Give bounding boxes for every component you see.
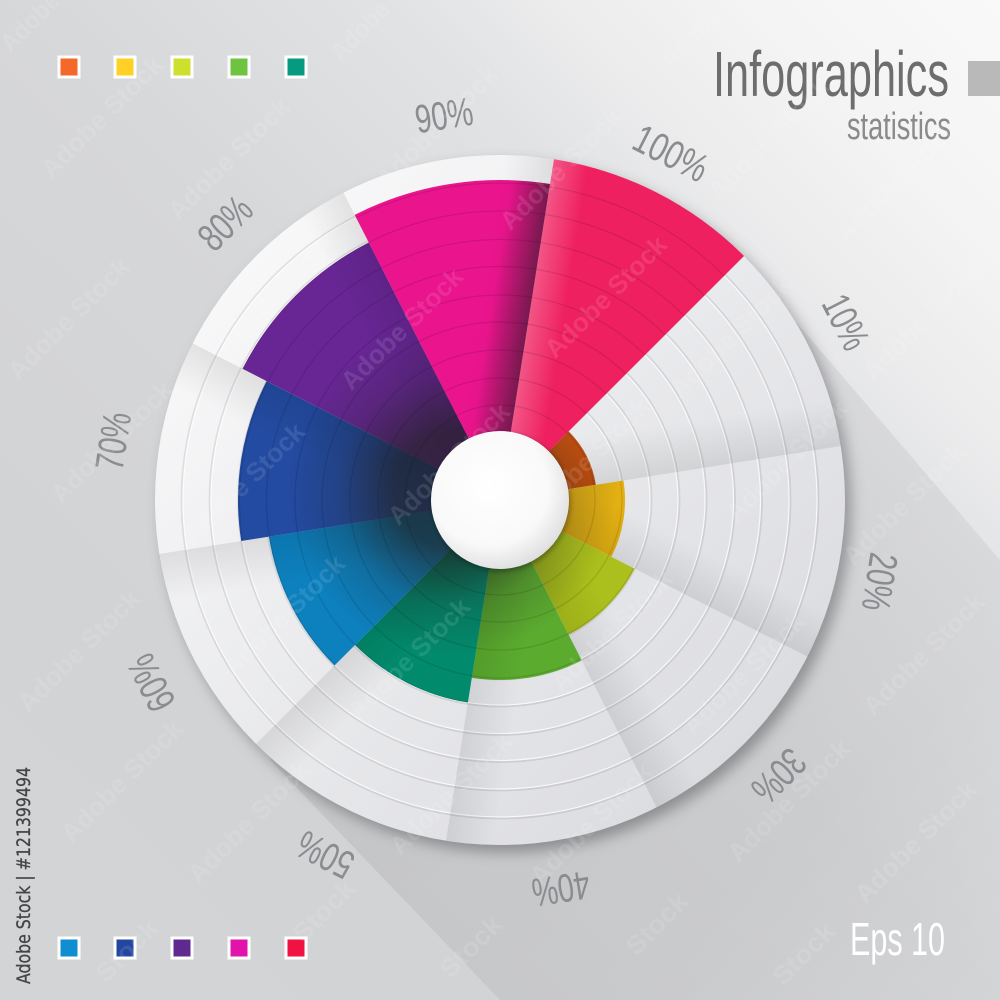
watermark pattern: Adobe Stock [369,59,504,194]
sector 40% green [472,500,582,680]
watermark pattern: Adobe Stock [856,252,991,387]
chart: coloured radial sectors [238,159,744,702]
watermark pattern: Adobe Stock [1,251,136,386]
label 50%: 50% [290,821,361,887]
sector 10% orange [500,431,596,500]
watermark pattern: Adobe Stock [544,563,679,698]
watermark pattern: Adobe Stock [334,261,469,396]
label 70%: 70% [88,409,140,473]
watermark pattern: Adobe Stock [721,733,856,868]
sector 60% blue [269,500,500,666]
swatch orange [59,57,79,77]
watermark pattern: Adobe Stock [11,583,146,718]
watermark pattern: Adobe Stock [208,223,343,358]
watermark pattern: Adobe Stock [856,586,991,721]
red sector highlight [500,159,744,500]
centre hub shadow [431,432,571,572]
watermark pattern: Adobe Stock [161,91,296,226]
watermark pattern: Adobe Stock [44,374,179,509]
panel: wheel plate [155,155,845,845]
sector 100% red [500,159,744,500]
watermark pattern: Adobe Stock [381,396,516,531]
watermark pattern: Adobe Stock [676,606,811,741]
sector 20% yellow [500,480,625,557]
concentric ring grooves on plate [182,182,818,818]
watermark pattern: Adobe Stock [848,774,983,909]
swatch purple [172,938,192,958]
legend: top row [59,57,306,77]
label 40%: 40% [529,862,593,914]
label 100%: 100% [626,117,715,191]
watermark pattern: Stock [286,873,362,948]
watermark pattern: Adobe Stock [341,591,476,726]
percentage labels around the wheel [88,90,905,914]
label 80%: 80% [190,188,262,260]
watermark pattern: Adobe Stock [828,113,963,248]
fold shading between segments [155,155,845,845]
watermark pattern: Stock [89,913,165,988]
watermark pattern: Stock [766,916,842,991]
label 10%: 10% [813,288,877,357]
centre hub [431,431,569,569]
label 30%: 30% [742,739,814,811]
sector 90% magenta [355,180,550,500]
watermark pattern: Adobe Stock [538,229,673,364]
long diagonal shadow of the wheel [270,315,1000,1000]
watermark pattern: Adobe Stock [176,416,311,551]
label 60%: 60% [119,647,185,718]
watermark pattern: Adobe Stock [701,71,836,206]
sector 50% teal [355,500,500,702]
watermark pattern: Adobe Stock [34,49,169,184]
magenta sector shadow beside the red sector [355,180,550,500]
swatch lime [172,57,192,77]
watermark pattern: Adobe Stock [181,754,316,889]
watermark pattern: Adobe Stock [493,101,628,236]
label 90%: 90% [412,90,476,142]
swatch green [229,57,249,77]
swatch teal [286,57,306,77]
label 20%: 20% [853,550,905,614]
sector 30% lime [500,500,634,634]
watermark pattern: Adobe Stock [54,713,189,848]
watermark pattern: Adobe Stock [216,548,351,683]
eps label: Eps 10 [850,913,945,965]
watermark pattern: Stock [433,909,509,984]
sector 70% dark blue [238,381,500,541]
watermark pattern: Adobe Stock [719,393,854,528]
watermark pattern: Adobe Stock [523,756,658,891]
watermark pattern: Adobe Stock [663,269,798,404]
subtitle: statistics [847,106,951,148]
legend: bottom row [59,938,306,958]
watermark pattern: Adobe Stock [521,391,656,526]
ring grooves over coloured sectors [239,182,724,702]
watermark pattern: Adobe Stock [836,436,971,571]
swatch dark blue [115,938,135,958]
swatch yellow [115,57,135,77]
swatch blue [59,938,79,958]
swatch magenta [229,938,249,958]
stock id vertical text: Adobe Stock | #121399494 [13,767,35,984]
swatch red [286,938,306,958]
watermark pattern: Stock [619,886,695,961]
title accent block [968,61,1000,96]
wheel soft shadow [161,162,851,852]
centre darkening on sectors [303,346,606,638]
watermark pattern: Adobe Stock [383,726,518,861]
sector 80% purple [242,242,500,500]
